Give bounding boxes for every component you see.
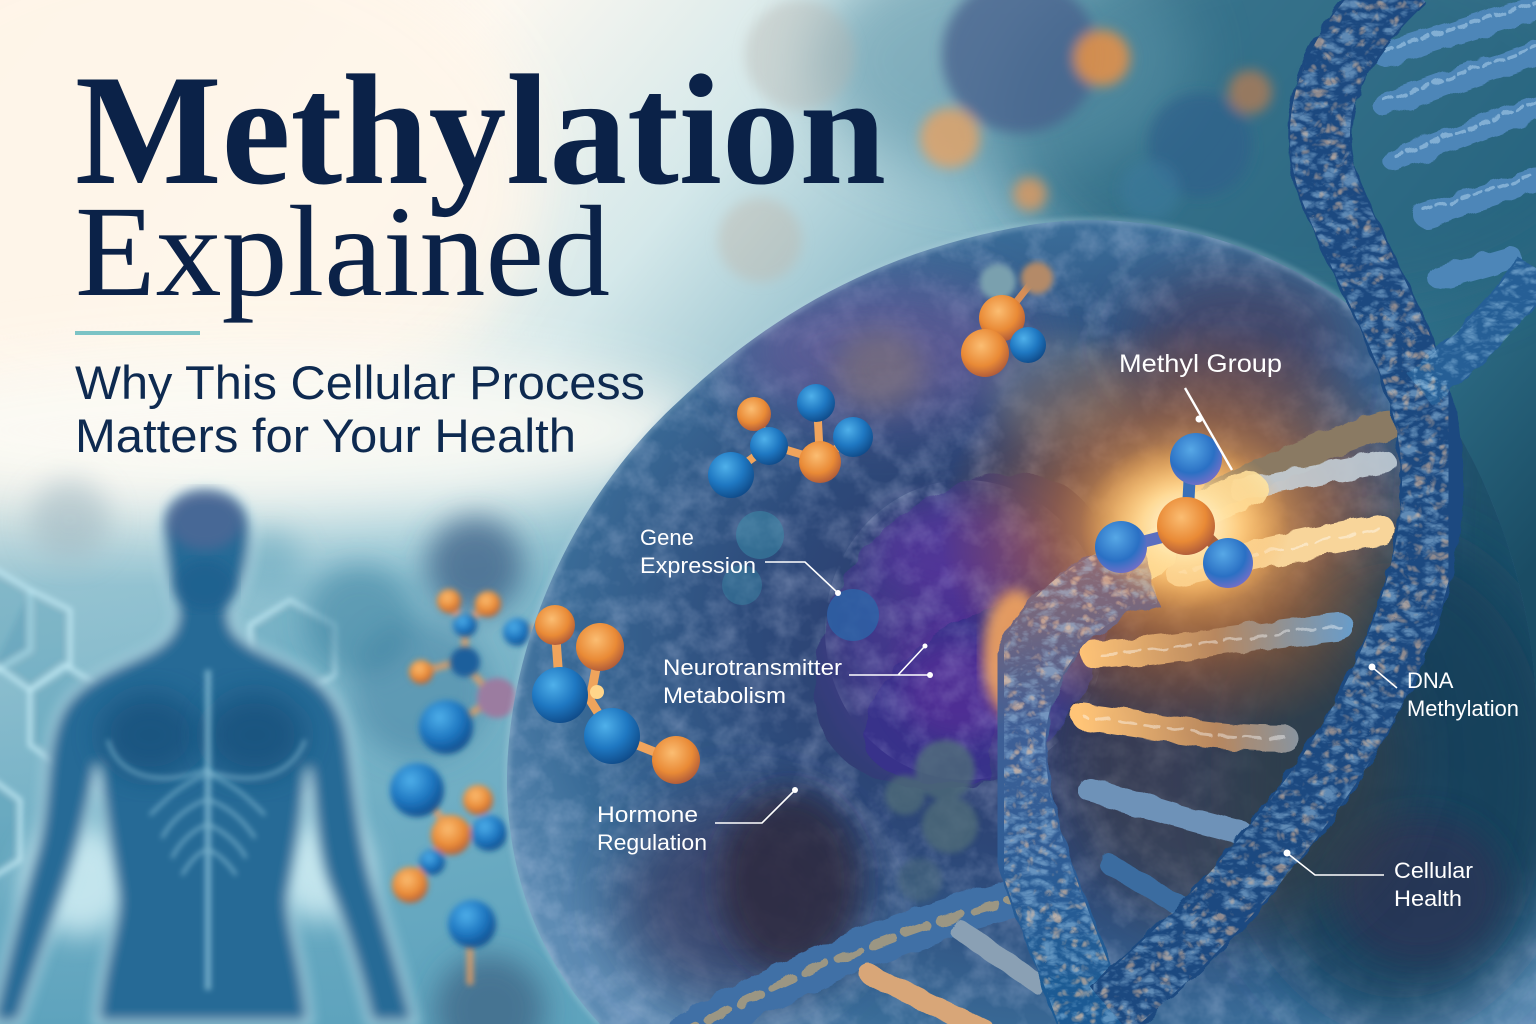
human body silhouette [0, 490, 416, 1024]
subtitle: Why This Cellular Process [75, 356, 645, 409]
label: Cellular Health [1284, 850, 1473, 911]
molecule: upper cell cluster [961, 262, 1053, 377]
label: Gene Expression [640, 525, 841, 596]
label: Hormone Regulation: Hormone [597, 802, 698, 827]
label: Cellular Health: Health [1394, 886, 1462, 911]
title: Explained: Explained [75, 180, 610, 324]
label: Gene Expression: Expression [640, 553, 756, 578]
glow around methyl group [940, 320, 1440, 740]
label: Methyl Group [1119, 350, 1282, 470]
label: DNA Methylation [1368, 664, 1519, 721]
DNA rungs centre [1085, 425, 1385, 905]
label: Hormone Regulation: Regulation [597, 830, 707, 855]
label: Hormone Regulation [597, 787, 798, 855]
cell [500, 210, 1536, 1024]
hot core of methyl glow [1080, 440, 1290, 610]
label: Cellular Health: Cellular [1394, 858, 1473, 883]
accent rule [75, 331, 200, 335]
label: Neurotransmitter Metabolism [663, 644, 933, 708]
blurred background cells lower left [25, 480, 545, 1024]
DNA strand lower left [690, 895, 1040, 1024]
DNA strand front left [983, 570, 1150, 1024]
label: DNA Methylation: DNA [1407, 668, 1454, 693]
molecule: central-left cluster [708, 384, 873, 498]
background hexagon network [0, 560, 335, 885]
label: Neurotransmitter Metabolism: Neurotransmitter [663, 655, 842, 680]
label: Gene Expression: Gene [640, 525, 694, 550]
nucleus [722, 473, 1111, 902]
title: Methylation: Methylation [75, 43, 886, 218]
molecule chain left (blurred) [390, 589, 555, 985]
molecule: front-left cluster [532, 605, 700, 784]
DNA strand front right [1110, 0, 1536, 1010]
subtitle: Matters for Your Health [75, 409, 576, 462]
label: DNA Methylation: Methylation [1407, 696, 1519, 721]
label: Methyl Group: Methyl Group [1119, 350, 1282, 378]
molecule: methyl group [1095, 433, 1253, 588]
subtitle [75, 356, 645, 462]
blurred background molecules top [718, 0, 1272, 282]
label: Neurotransmitter Metabolism: Metabolism [663, 683, 786, 708]
DNA rungs upper right [1385, 3, 1536, 278]
